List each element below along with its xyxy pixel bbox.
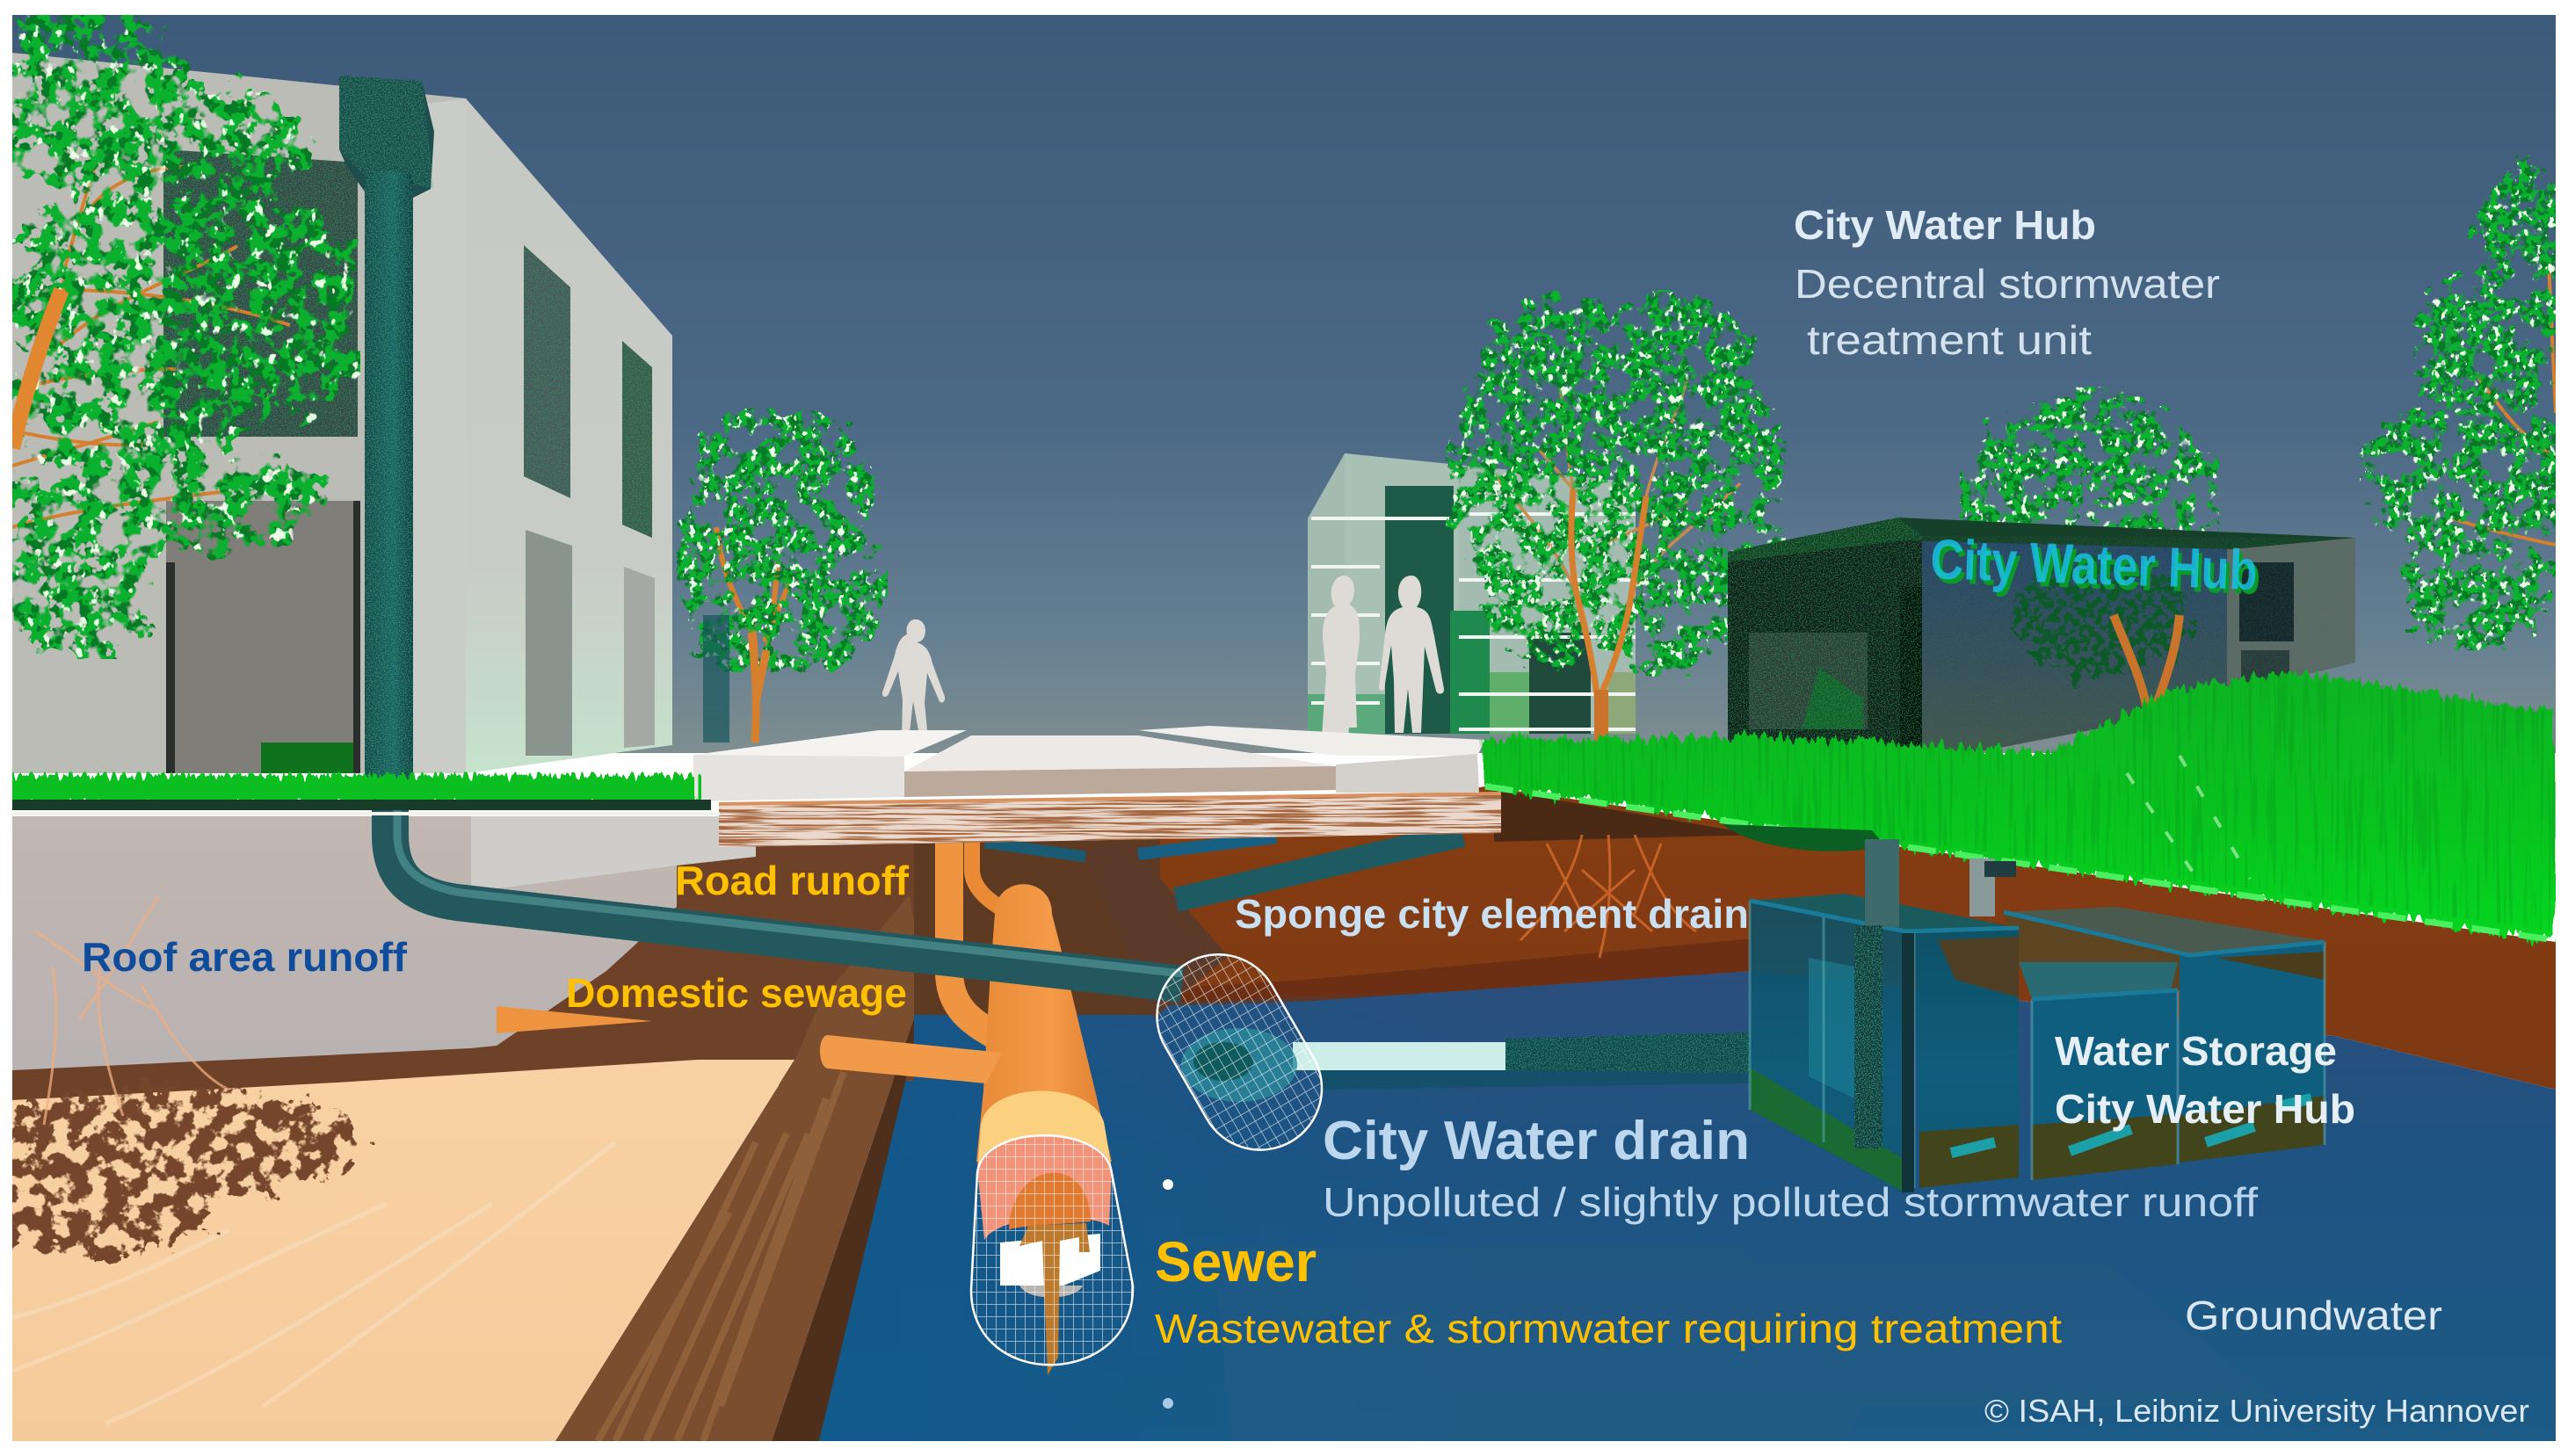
city water hub downpipe [1854,839,1914,1192]
left tank front [1914,930,2019,1188]
building lower window [166,501,360,773]
City Water Hub building [1728,518,2355,763]
trench wood wall [555,895,914,1441]
right lawn [1479,672,2556,942]
road wood layer [719,793,1501,847]
label: wastewater and stormwater: Wastewater & stormwater requiring treatment [1155,1306,2062,1351]
water storage tanks [1750,839,2325,1192]
sand floor [12,1060,794,1441]
background building with stripes [1308,453,1636,734]
roots on left wall [35,896,229,1125]
main sewer [976,884,1112,1162]
sewage drip [1019,1223,1090,1375]
tank lower frames [1750,1068,2325,1192]
hub dark column [1900,587,1922,763]
building upper window [163,149,358,437]
curved connection [972,842,1002,909]
roots beneath the road [1520,835,1696,958]
trench dark side [772,1018,914,1441]
central earth wedge [1081,843,1229,1018]
left sidewalk [693,730,967,801]
domestic sewage stub [820,1035,1002,1083]
label: city water hub storage: City Water Hub [2055,1086,2355,1132]
hub sign lettering: City Water Hub [1933,532,2262,606]
water reflections [1213,1248,2285,1441]
window speckle [163,149,652,538]
hub speckle [1728,518,1922,763]
concrete wall left [12,816,756,1070]
sand streaks [12,1142,615,1423]
left lawn [12,775,720,815]
left tank side [1750,901,1905,1192]
roof runoff pipe below ground [390,791,1182,984]
central carriageway [904,735,1336,797]
roots [35,835,1696,1125]
small cone pipe [497,1006,652,1033]
right tank left face [2004,914,2189,990]
side windows [524,245,655,756]
road structure [693,726,1501,847]
sewer inner pink section [977,1135,1112,1240]
right tank front [2180,942,2325,1163]
person right at building [1379,576,1444,733]
label: road runoff: Road runoff [675,858,910,903]
back pipe behind building [703,615,729,742]
road runoff drop pipe [949,842,997,1037]
underground pipe to water storage [1293,1031,1830,1090]
sky [12,15,2556,753]
thin overflow pipe [1970,858,2016,916]
label: sewer heading: Sewer [1155,1230,1317,1293]
tree behind left building [677,409,888,742]
label: domestic sewage: Domestic sewage [566,970,907,1016]
person left at building [1322,576,1360,736]
tree shadow on sand [0,1085,365,1257]
building corner band [413,98,466,773]
hub end wing [2227,532,2355,694]
lower pipe section [1019,1286,1083,1298]
left dark soil [12,844,914,1107]
hub left glazing [1749,633,1868,729]
connection lid between tanks [2019,962,2178,999]
inner sewage [1009,1173,1091,1230]
marker dot lower [1163,1398,1173,1409]
under-road pipes [985,835,1462,900]
tree E right edge [2360,154,2568,650]
label: water storage: Water Storage [2055,1028,2337,1074]
tree seen through the hub glass [2013,554,2188,721]
sponge city element drain pipe [1176,835,1462,900]
middle tank front [2032,990,2178,1180]
copyright line: © ISAH, Leibniz University Hannover [1984,1393,2529,1429]
dark wedge below the road edge [1494,789,1758,842]
tank edges [1750,901,2325,1188]
building front wall [12,53,466,773]
right sidewalk [1138,726,1485,793]
trench grain [598,1072,844,1441]
dark drain basin under lawn [1723,824,1885,851]
label: City Water Hub heading: City Water Hub [1794,202,2096,248]
label: city water drain heading: City Water drain [1323,1111,1750,1171]
sewer cream section [977,1091,1112,1169]
building side wall [466,98,672,773]
hub right face [1922,541,2227,752]
pedestrians [882,576,1444,740]
label: sponge city element drain: Sponge city element drain [1235,891,1749,937]
hub left face [1728,518,1922,763]
person walking centre [882,619,945,740]
sewer mesh tube [971,1135,1133,1365]
groundwater body [816,971,2556,1441]
right tank top [2004,907,2319,955]
marker dot upper [1163,1179,1173,1190]
rain gutter head [339,76,434,198]
tree A foreground left [0,0,360,659]
tree D above the hub [1960,387,2219,531]
hub sign lettering: City Water Hub [1929,527,2259,602]
label: roof area runoff: Roof area runoff [82,934,408,980]
label: treatment unit: treatment unit [1807,317,2092,363]
orange sewer system [497,842,1133,1375]
hub roof [1728,518,2355,562]
label: decentral stormwater: Decentral stormwater [1795,261,2220,307]
left tank top [1750,894,2019,931]
downpipe [365,171,413,786]
city water drain mesh with filter [1135,932,1345,1172]
label: unpolluted stormwater runoff: Unpolluted / slightly polluted stormwater runoff [1323,1179,2258,1225]
tree C centre [1446,290,1788,752]
soil background right [1143,786,2556,1090]
tank interior panel [1809,958,1854,1098]
left building [12,53,672,786]
white block in sewer [1000,1234,1100,1286]
dark soil ledge [1160,938,1754,1011]
label: groundwater: Groundwater [2185,1293,2442,1338]
